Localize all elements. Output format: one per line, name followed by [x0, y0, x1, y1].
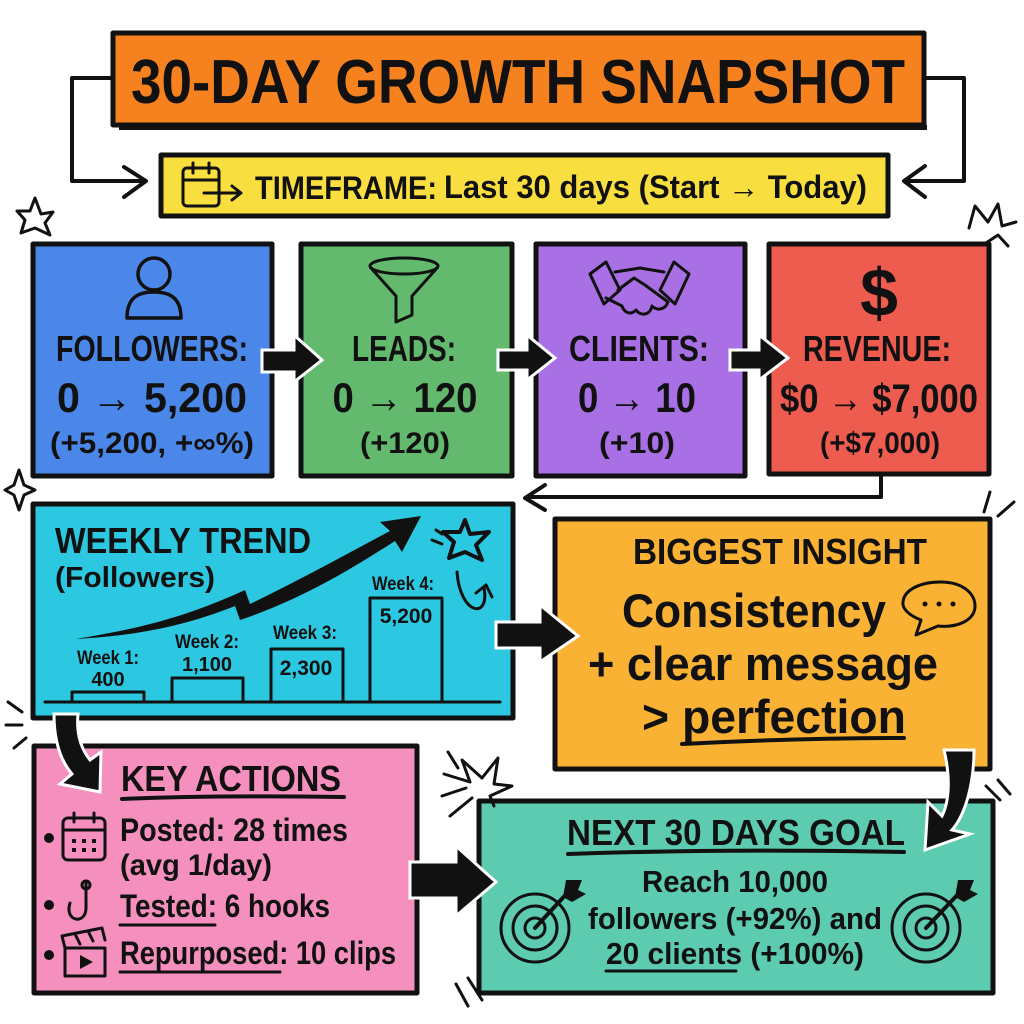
growth arrow	[76, 516, 421, 639]
arrow: trend to insight	[496, 605, 578, 662]
arrow: insight to goal	[925, 750, 974, 850]
icon: calendar arrow	[183, 163, 241, 206]
connector: title to timeframe left	[72, 78, 146, 197]
panel: revenue: (+$7,000)	[820, 427, 940, 460]
panel: biggest insight: BIGGEST INSIGHT	[633, 531, 927, 572]
panel: followers: FOLLOWERS:	[56, 328, 248, 369]
decoration: burst top-right	[969, 204, 1016, 246]
bar week 2	[172, 632, 243, 702]
panel: clients: CLIENTS:	[569, 328, 709, 369]
panel: leads	[301, 244, 512, 476]
panel: next 30 days goal: NEXT 30 DAYS GOAL	[567, 812, 905, 853]
bar week 4: Week 4:	[372, 574, 434, 595]
panel: followers	[33, 244, 272, 476]
icon: dollar: $	[860, 255, 898, 331]
bullet: tested: Tested: 6 hooks	[120, 888, 330, 924]
panel: key actions: KEY ACTIONS	[121, 758, 341, 799]
panel: leads: (+120)	[360, 427, 450, 460]
star and swirl	[432, 520, 492, 609]
title banner	[113, 33, 927, 130]
bullet: posted: Posted: 28 times	[120, 812, 348, 848]
panel: biggest insight: + clear message	[588, 637, 938, 690]
bar week 3: 2,300	[280, 657, 332, 680]
icon: speech bubble	[903, 582, 975, 635]
icon: calendar	[63, 813, 105, 860]
timeframe bar	[161, 155, 888, 216]
decoration: sparkle	[5, 470, 35, 510]
decoration: dashes right of insight	[984, 492, 1014, 800]
bullet: repurposed	[44, 928, 396, 976]
panel: followers: 0 → 5,200	[57, 374, 247, 421]
panel: next 30 days goal: 20 clients (+100%)	[606, 936, 864, 971]
connector: revenue to weekly trend	[525, 474, 881, 510]
panel: leads: LEADS:	[352, 328, 456, 369]
panel: leads: 0 → 120	[332, 374, 478, 421]
panel: biggest insight: Consistency	[622, 584, 886, 637]
panel: next 30 days goal: Reach 10,000	[642, 864, 828, 899]
panel: revenue: REVENUE:	[803, 328, 951, 369]
panel: key actions	[34, 746, 417, 993]
panel: clients	[536, 244, 745, 476]
timeframe bar: Last 30 days (Start → Today)	[444, 169, 867, 205]
bar week 4: 5,200	[380, 605, 432, 628]
bullet: posted	[44, 812, 348, 882]
icon: target right	[892, 880, 978, 962]
bar week 4	[370, 574, 442, 702]
title banner: 30-DAY GROWTH SNAPSHOT	[131, 48, 905, 117]
panel: next 30 days goal	[479, 801, 993, 993]
panel: weekly trend: WEEKLY TREND	[55, 520, 311, 561]
icon: hook	[69, 881, 86, 919]
icon: funnel	[370, 258, 438, 322]
arrow: leads to clients	[498, 335, 555, 380]
icon: handshake	[590, 262, 689, 314]
icon: clapperboard	[62, 928, 105, 976]
panel: clients: (+10)	[599, 427, 675, 460]
bar week 3: Week 3:	[273, 623, 337, 644]
panel: next 30 days goal: followers (+92%) and	[588, 901, 882, 936]
bullet: posted: (avg 1/day)	[120, 849, 272, 882]
arrow: clients to revenue	[730, 335, 788, 380]
connector: title to timeframe right	[904, 78, 964, 197]
arrow: followers to leads	[262, 335, 322, 382]
bullet: tested	[44, 881, 330, 925]
timeframe bar: TIMEFRAME:	[255, 170, 437, 206]
panel: biggest insight: > perfection	[642, 690, 906, 743]
panel: weekly trend	[33, 504, 513, 718]
bullet: repurposed: Repurposed: 10 clips	[120, 935, 396, 971]
decoration: burst above goal	[442, 752, 512, 816]
panel: biggest insight	[555, 519, 990, 769]
bar week 2: 1,100	[182, 654, 232, 676]
panel: revenue: $0 → $7,000	[780, 377, 978, 421]
panel: revenue	[769, 244, 989, 474]
icon: target left	[501, 880, 586, 962]
arrow: actions to goal	[410, 846, 496, 916]
bar week 2: Week 2:	[175, 632, 239, 653]
bar week 1: Week 1:	[77, 648, 139, 669]
decoration: star top-left	[17, 198, 53, 235]
panel: weekly trend: (Followers)	[55, 562, 215, 594]
bar week 3	[271, 623, 343, 702]
decoration: dashes bottom	[456, 978, 482, 1006]
panel: clients: 0 → 10	[578, 374, 696, 421]
arrow: trend to key actions	[54, 714, 101, 792]
bar week 1: 400	[91, 669, 125, 691]
bar week 1	[72, 648, 144, 702]
panel: followers: (+5,200, +∞%)	[50, 427, 254, 460]
decoration: dashes left	[6, 702, 26, 748]
icon: person	[127, 258, 181, 318]
